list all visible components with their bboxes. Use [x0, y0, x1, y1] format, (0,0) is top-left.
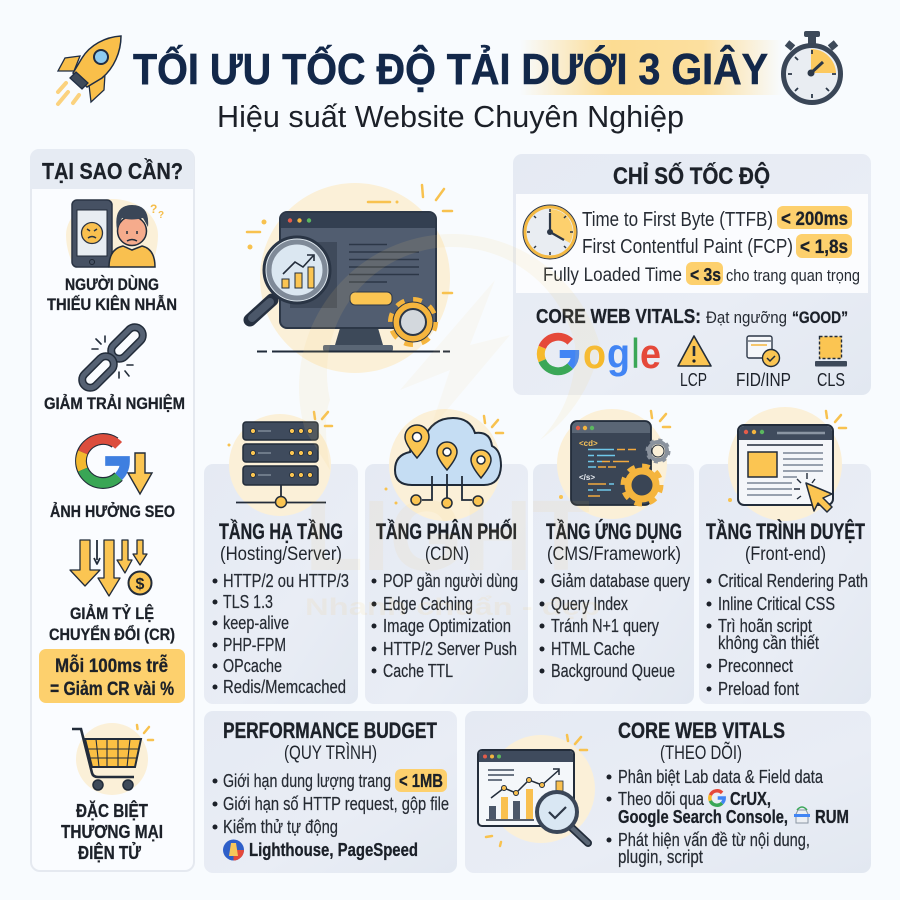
list: browser items — [706, 571, 868, 699]
watermark logo: LIGHT — [305, 480, 590, 592]
panel: why needed — [30, 149, 194, 871]
panel: speed metrics — [513, 154, 871, 395]
list: budget items: Giới hạn dung lượng trang — [223, 771, 391, 791]
icon: CDN cloud — [384, 409, 503, 521]
heading: performance budget: PERFORMANCE BUDGET — [223, 718, 437, 743]
list: application items: Giảm database query — [551, 571, 690, 591]
label: reduced experience: GIẢM TRẢI NGHIỆM — [44, 394, 185, 413]
icon: code window with gears: <cd> — [579, 439, 598, 448]
heading: why needed: TẠI SAO CẦN? — [42, 157, 183, 184]
callout: 100ms delay: Mỗi 100ms trễ — [55, 655, 168, 677]
label: lower conversion rate: GIẢM TỶ LỆ — [70, 604, 154, 623]
metric: fully loaded time: Fully Loaded Time — [543, 265, 682, 286]
icon: SEO impact — [72, 430, 152, 494]
list: infrastructure items: keep-alive — [223, 613, 289, 633]
panel: application tier — [533, 409, 694, 704]
list: distribution items: POP gần người dùng — [383, 571, 518, 591]
list: browser items: Inline Critical CSS — [718, 594, 835, 614]
list: monitoring items: Phân biệt Lab data & Field data — [618, 767, 824, 787]
heading: application tier: TẦNG ỨNG DỤNG — [546, 519, 682, 544]
icon: CLS — [815, 336, 847, 390]
label: especially e-commerce: THƯƠNG MẠI — [61, 822, 163, 842]
list: browser items: Critical Rendering Path — [718, 571, 868, 591]
list: infrastructure items: HTTP/2 ou HTTP/3 — [223, 571, 349, 591]
metric: fully loaded time: < 3s — [690, 265, 721, 285]
heading: performance budget: (QUY TRÌNH) — [284, 743, 377, 764]
icon: shopping cart — [72, 723, 153, 795]
list: budget items: Giới hạn số HTTP request, gộp file — [223, 794, 449, 814]
heading: distribution tier: (CDN) — [425, 544, 469, 565]
list: distribution items: HTTP/2 Server Push — [383, 639, 517, 659]
label: impatient users: THIẾU KIÊN NHẪN — [47, 295, 177, 314]
metric: fully loaded time: cho trang quan trọng — [726, 266, 860, 285]
heading: core web vitals monitoring: (THEO DÕI) — [660, 742, 742, 764]
callout: 100ms delay — [39, 649, 185, 703]
heading: distribution tier — [376, 518, 517, 565]
icon: google logo: o — [583, 330, 606, 377]
icon: CLS: CLS — [817, 370, 845, 390]
list: browser items: Trì hoãn script — [718, 616, 812, 636]
icon: FID/INP: FID/INP — [736, 370, 791, 390]
heading: core web vitals good — [536, 306, 848, 328]
list: application items: Tránh N+1 query — [551, 616, 659, 636]
heading: distribution tier: TẦNG PHÂN PHỐI — [376, 518, 517, 544]
panel: infrastructure tier — [204, 412, 358, 704]
label: lower conversion rate: CHUYỂN ĐỔI (CR) — [49, 625, 175, 644]
icon: server rack — [228, 412, 332, 516]
icon: google logo — [541, 330, 661, 377]
list: budget items — [212, 769, 449, 837]
icon: clock — [523, 205, 577, 259]
icon: broken chain — [79, 324, 146, 391]
label: impatient users: NGƯỜI DÙNG — [65, 275, 159, 294]
icon: rocket — [58, 36, 121, 104]
heading: application tier: (CMS/Framework) — [547, 544, 681, 565]
metric: TTFB: < 200ms — [781, 209, 848, 230]
label: SEO impact: ẢNH HƯỞNG SEO — [50, 502, 175, 521]
watermark logo: Nhanh chuẩn - đẹp — [305, 594, 600, 621]
list: application items: Background Queue — [551, 661, 675, 681]
metric: fully loaded time — [543, 262, 860, 286]
list: monitoring items: RUM — [815, 807, 849, 827]
heading: core web vitals good: CORE WEB VITALS: — [536, 306, 701, 328]
title: TỐI ƯU TỐC ĐỘ TẢI DƯỚI 3 GIÂY — [133, 43, 768, 94]
label: lower conversion rate — [49, 604, 175, 644]
heading: infrastructure tier: TẦNG HẠ TẦNG — [219, 519, 343, 544]
metric: FCP: < 1,8s — [800, 237, 848, 258]
heading: infrastructure tier — [219, 519, 343, 565]
list: distribution items: Cache TTL — [383, 661, 453, 681]
list: browser items: Preconnect — [718, 656, 793, 676]
heading: application tier — [546, 519, 682, 565]
list: infrastructure items: OPcache — [223, 656, 282, 676]
list: monitoring items: Phát hiện vấn đề từ nội dung, — [618, 830, 810, 850]
icon: google logo: e — [640, 330, 661, 377]
title band — [520, 40, 782, 95]
watermark logo — [299, 234, 600, 621]
label: especially e-commerce: ĐẶC BIỆT — [76, 800, 148, 821]
icon: google logo: l — [632, 330, 639, 377]
list: monitoring items: Theo dõi qua — [618, 789, 705, 809]
list: monitoring items: CrUX, — [730, 789, 771, 809]
panel: performance budget — [204, 711, 457, 873]
icon: code window with gears — [557, 409, 670, 519]
list: budget items: Kiểm thử tự động — [223, 817, 338, 837]
list: distribution items: Edge Caching — [383, 594, 473, 614]
list: monitoring items — [606, 767, 849, 867]
heading: browser tier — [706, 519, 865, 565]
heading: infrastructure tier: (Hosting/Server) — [220, 544, 342, 565]
list: monitoring items: Google Search Console, — [618, 807, 788, 827]
icon: falling conversion arrows — [70, 540, 152, 596]
list: infrastructure items: TLS 1.3 — [223, 592, 273, 612]
icon: google mini — [710, 791, 724, 805]
icon: browser window with cursor — [728, 407, 846, 521]
heading: core web vitals monitoring: CORE WEB VITALS — [618, 718, 785, 743]
list: distribution items — [372, 571, 518, 681]
icon: LCP warning — [678, 336, 711, 390]
icon: RUM store — [794, 807, 810, 823]
heading: core web vitals monitoring — [618, 718, 785, 764]
list: application items: HTML Cache — [551, 639, 635, 659]
label: especially e-commerce — [61, 800, 163, 863]
icon: FID/INP — [736, 336, 791, 390]
metric: FCP: First Contentful Paint (FCP) — [582, 236, 793, 258]
label: impatient users — [47, 275, 177, 314]
icon: falling conversion arrows: $ — [136, 576, 144, 593]
icon: impatient user: ? — [158, 210, 164, 221]
heading: core web vitals good: Đạt ngưỡng — [706, 308, 787, 327]
list: infrastructure items: Redis/Memcached — [223, 677, 346, 697]
list: application items — [540, 571, 690, 681]
list: budget items: < 1MB — [399, 771, 443, 791]
list: infrastructure items — [212, 571, 349, 697]
icon: LCP warning: LCP — [680, 370, 707, 390]
tools: lighthouse and pagespeed: Lighthouse, PageSpeed — [249, 840, 418, 860]
panel: distribution tier — [365, 409, 528, 704]
icon: google logo: g — [607, 330, 630, 377]
subtitle: Hiệu suất Website Chuyên Nghiệp — [217, 99, 684, 134]
heading: performance budget — [223, 718, 437, 764]
list: distribution items: Image Optimization — [383, 616, 511, 636]
illustration: website analysis monitor — [247, 183, 452, 373]
list: infrastructure items: PHP-FPM — [223, 635, 286, 655]
list: monitoring items: plugin, script — [618, 847, 703, 867]
list: browser items: không cần thiết — [718, 633, 819, 653]
panel: browser tier — [699, 407, 871, 704]
heading: browser tier: (Front-end) — [745, 544, 826, 565]
icon: impatient user — [66, 199, 164, 267]
icon: analytics window — [478, 735, 595, 846]
list: browser items: Preload font — [718, 679, 799, 699]
heading: core web vitals good: “GOOD” — [792, 308, 848, 327]
label: especially e-commerce: ĐIỆN TỬ — [78, 842, 141, 863]
list: application items: Query Index — [551, 594, 628, 614]
icon: impatient user: ? — [150, 202, 157, 216]
callout: 100ms delay: = Giảm CR vài % — [50, 679, 174, 700]
heading: speed metrics: CHỈ SỐ TỐC ĐỘ — [613, 161, 770, 190]
panel: core web vitals monitoring — [465, 711, 871, 873]
icon: stopwatch — [784, 31, 840, 102]
icon: code window with gears: </s> — [579, 473, 595, 482]
metric: TTFB: Time to First Byte (TTFB) — [582, 209, 773, 231]
